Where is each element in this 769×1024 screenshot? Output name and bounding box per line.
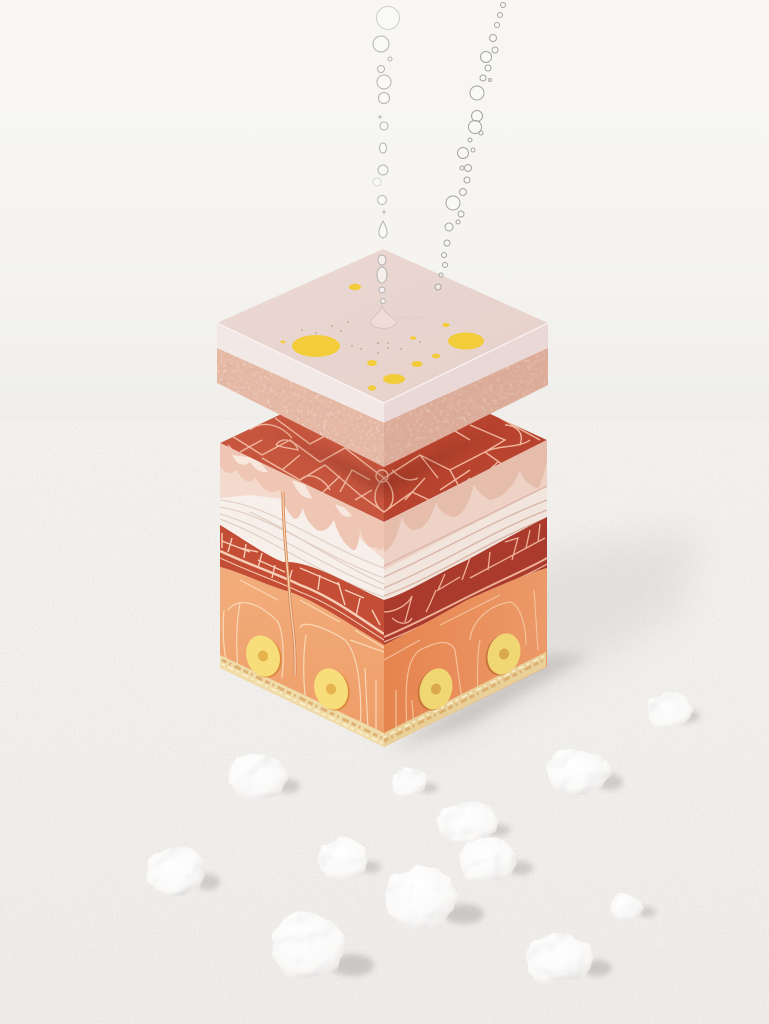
- cotton ball 1: [645, 692, 700, 728]
- floor surface: [0, 420, 769, 1024]
- water splash on surface: [370, 306, 425, 328]
- right pink scallops: [384, 440, 547, 552]
- fat cell donut 1: [241, 630, 287, 682]
- water droplet stream left: [373, 6, 400, 304]
- fat cell donut 2: [309, 663, 355, 715]
- fat cell donut 3: [412, 664, 458, 715]
- slab right face textured layer: [384, 340, 549, 470]
- fine dots on surface: [301, 321, 421, 354]
- right pale dermis layer: [384, 487, 547, 600]
- left pale pink zone: [220, 466, 384, 560]
- cube top face: red cell pattern: [220, 394, 547, 522]
- slab top face: [217, 249, 548, 403]
- cotton ball 10: [272, 912, 374, 979]
- cotton ball 12: [610, 894, 656, 921]
- cotton ball 6: [457, 838, 533, 882]
- left orange fat layer: [220, 567, 384, 747]
- cube left face layers: [220, 443, 384, 747]
- cotton ball 3: [390, 767, 438, 797]
- cotton ball 8: [147, 847, 220, 896]
- slab right face light layer: [384, 323, 548, 423]
- right pale pink zone: [384, 462, 547, 570]
- shadow of floating slab on cube: [262, 425, 505, 495]
- background wall: [0, 0, 769, 425]
- hair follicle strand: [283, 492, 295, 675]
- left pink scallops: [220, 443, 384, 550]
- right red band: [384, 517, 547, 645]
- left pale dermis layer: [220, 496, 384, 598]
- lower skin cube: [220, 365, 547, 747]
- fat cell donut 4: [480, 629, 526, 680]
- slab left face textured layer: [217, 340, 385, 470]
- floating top slab: [217, 249, 549, 470]
- cotton ball 4: [548, 750, 623, 795]
- left red band: [220, 525, 384, 645]
- sand layer at base of cube: [220, 652, 546, 747]
- right orange fat layer: [384, 568, 547, 747]
- cube cast shadow on floor: [384, 530, 700, 749]
- slab left face light layer: [217, 323, 384, 423]
- cube right face layers: [384, 440, 547, 747]
- yellow oil droplets: [280, 284, 484, 391]
- water droplet stream right: [435, 2, 506, 290]
- cotton ball 5: [437, 801, 510, 843]
- cotton ball 11: [526, 932, 612, 984]
- cotton ball 7: [318, 838, 381, 880]
- cotton ball 2: [229, 755, 300, 800]
- cotton ball 9: [386, 863, 484, 931]
